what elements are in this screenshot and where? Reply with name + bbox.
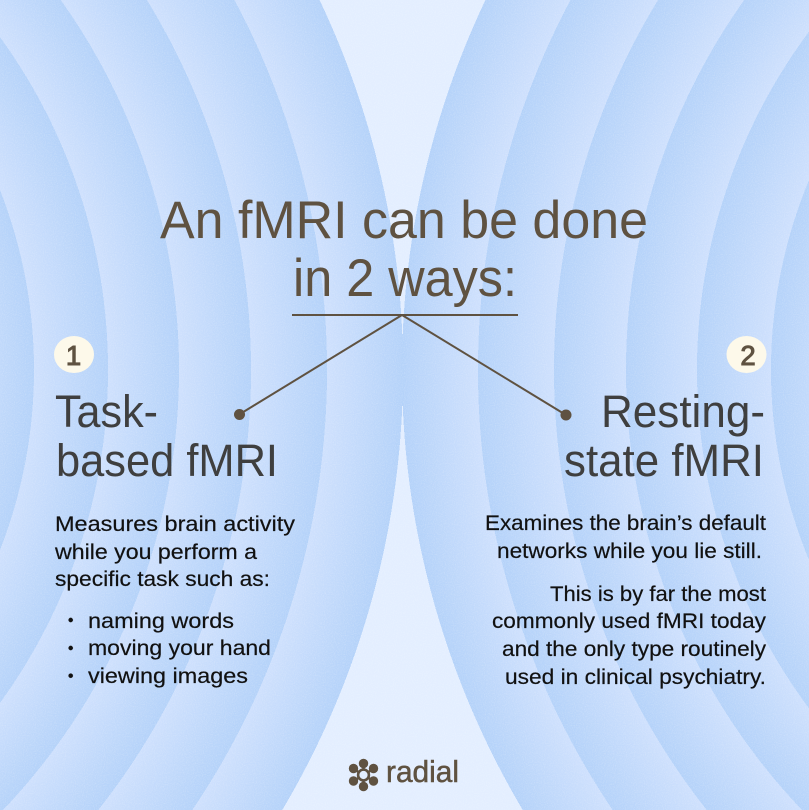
bullet list of example tasks: moving your hand <box>88 636 271 660</box>
bullet list of example tasks: viewing images <box>88 664 248 688</box>
connector: underline with branches to both methods <box>234 315 572 420</box>
description: clinical use: commonly used fMRI today <box>492 609 766 633</box>
icon: flower mark <box>349 759 378 791</box>
description: clinical use: used in clinical psychiatry. <box>505 665 766 689</box>
description: default networks <box>485 511 766 563</box>
bullet list of example tasks <box>68 609 271 688</box>
panel: task-based fMRI <box>54 336 295 688</box>
heading: task-based fMRI: Task- <box>55 386 158 437</box>
number badge 2: 2 <box>740 340 756 371</box>
title: in 2 ways: <box>293 249 517 308</box>
number badge 1: 1 <box>66 340 81 371</box>
title: An fMRI can be done <box>160 191 648 250</box>
number badge 1 <box>54 336 94 373</box>
heading: resting-state fMRI: Resting- <box>601 386 765 437</box>
heading: task-based fMRI: based fMRI <box>56 435 278 486</box>
heading: task-based fMRI <box>55 386 278 486</box>
description: specific task such as: <box>55 567 270 591</box>
description: clinical use: and the only type routinely <box>502 637 766 661</box>
title <box>160 191 648 308</box>
description <box>54 512 295 591</box>
heading: resting-state fMRI: state fMRI <box>564 435 764 486</box>
description: default networks: networks while you lie still. <box>497 539 762 563</box>
description: default networks: Examines the brain’s default <box>485 511 766 535</box>
logo: radial <box>349 755 459 791</box>
wordmark: radial <box>386 755 459 789</box>
description: Measures brain activity <box>55 512 295 536</box>
heading: resting-state fMRI <box>564 386 765 486</box>
number badge 2 <box>726 336 766 373</box>
description: clinical use: This is by far the most <box>550 582 766 606</box>
description: while you perform a <box>54 540 257 564</box>
bullet list of example tasks: naming words <box>88 609 234 633</box>
description: clinical use <box>492 582 766 689</box>
panel: resting-state fMRI <box>485 336 766 689</box>
